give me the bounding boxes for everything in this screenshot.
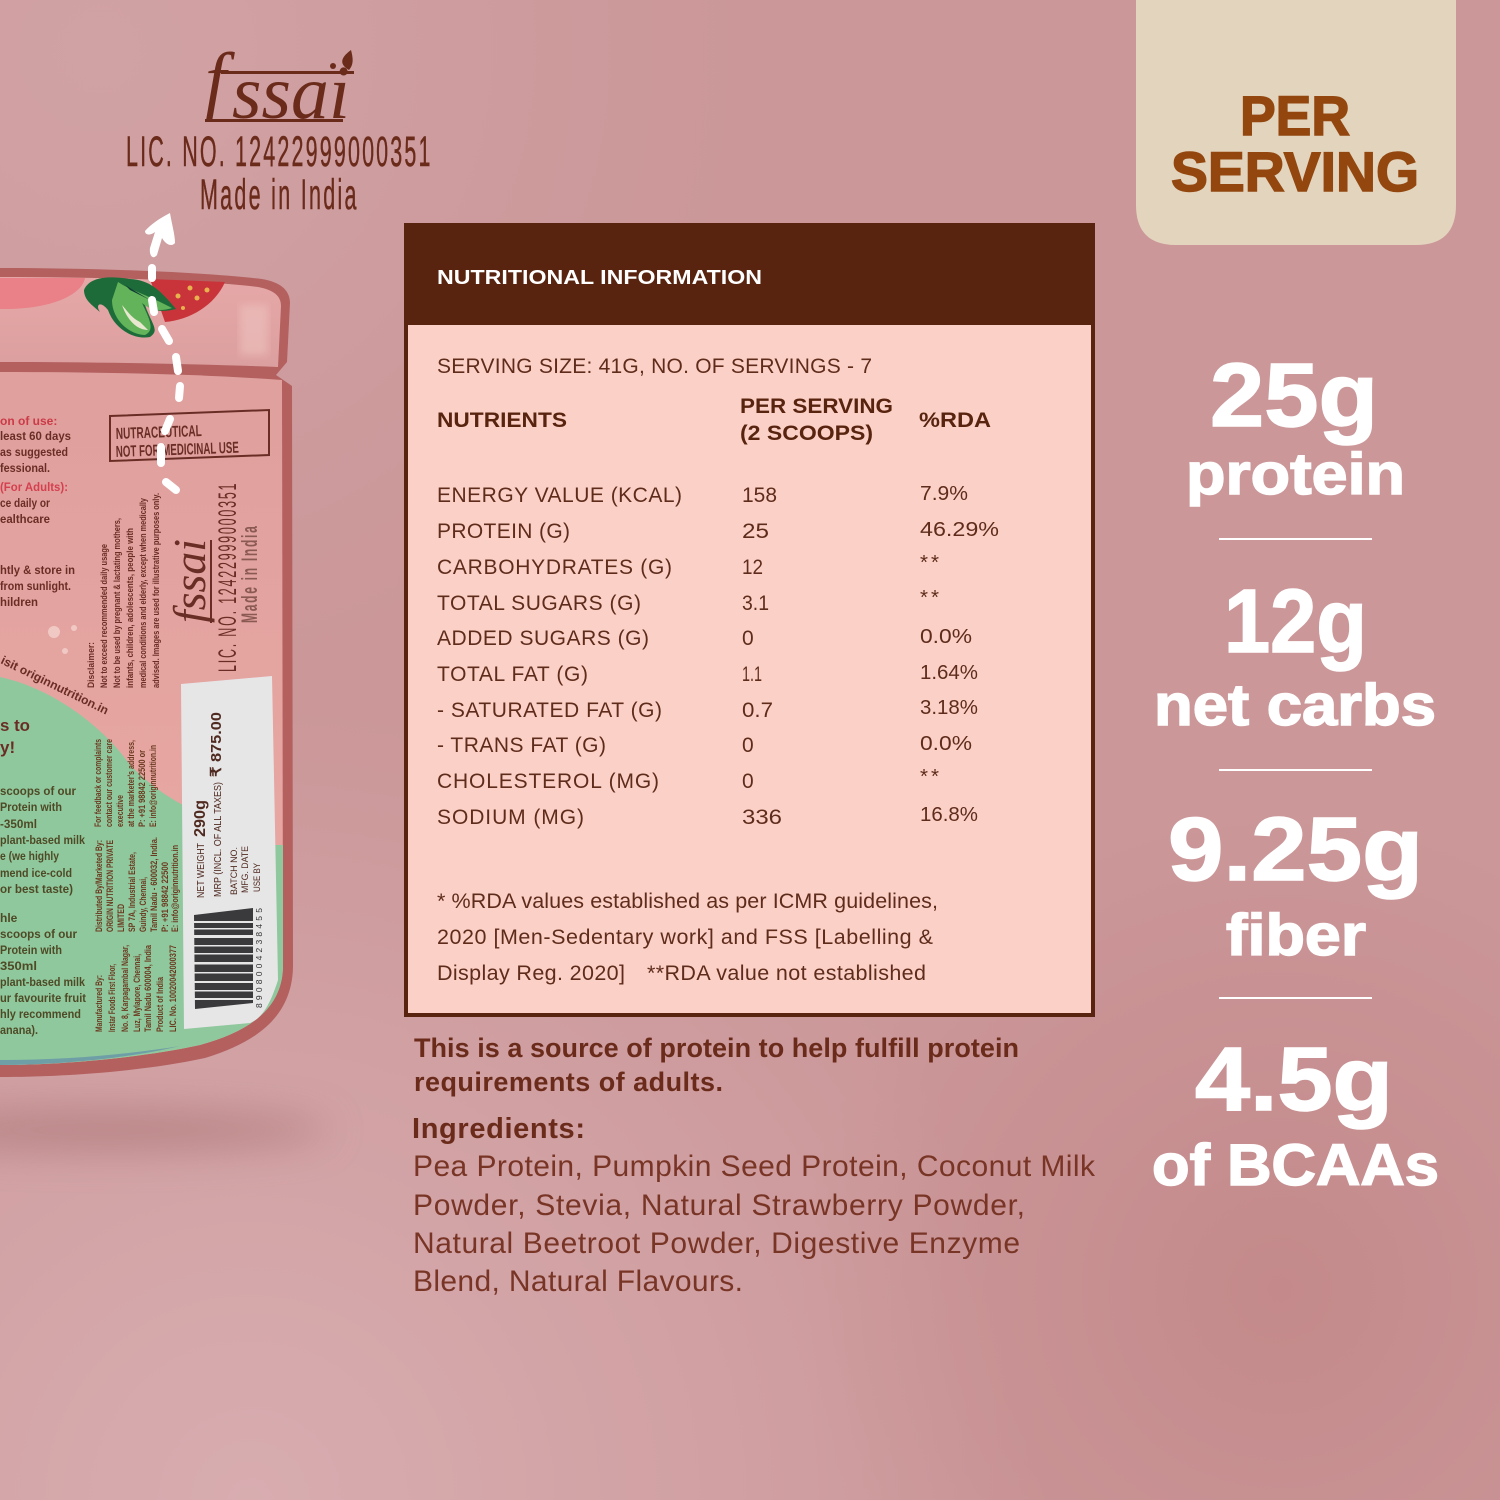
distributor text — [93, 739, 181, 1032]
ingredients: Blend, Natural Flavours. — [413, 1265, 743, 1298]
per serving values: 0 — [742, 627, 754, 650]
left column text: anana). — [0, 1023, 38, 1037]
serving size: SERVING SIZE: 41G, NO. OF SERVINGS - 7 — [437, 355, 872, 378]
jar fssai logo: Made in India — [237, 526, 262, 623]
stats column — [1152, 346, 1439, 1198]
left column text: y! — [0, 738, 15, 757]
column headers: (2 SCOOPS) — [740, 422, 873, 445]
white price label: USE BY — [252, 862, 263, 892]
fssai wordmark: f — [205, 38, 235, 122]
fssai wordmark — [205, 38, 354, 135]
distributor text: SP 7A, Industrial Estate, — [127, 852, 138, 932]
panel header — [404, 223, 1095, 325]
nutrient names: TOTAL FAT (G) — [437, 663, 588, 686]
nutrient names: - TRANS FAT (G) — [437, 734, 606, 757]
left column text: -350ml — [0, 817, 37, 831]
per serving values: 0 — [742, 734, 754, 757]
distributor text: Tamil Nadu 600004, India — [143, 944, 154, 1032]
distributor text: Guindy, Chennai, — [138, 877, 149, 932]
distributor text: Tamil Nadu - 600032, India. — [149, 837, 160, 932]
distributor text: No. 8, Karpagambal Nagar, — [120, 945, 131, 1032]
stat: net carbs — [1154, 572, 1436, 738]
barcode — [194, 908, 264, 1009]
per serving tag: SERVING — [1171, 140, 1419, 203]
rda values: 16.8% — [920, 803, 978, 826]
per serving values: 158 — [742, 484, 777, 507]
left column text: plant-based milk — [0, 975, 85, 989]
left column text: ur favourite fruit — [0, 991, 86, 1005]
left column text: fessional. — [0, 461, 50, 475]
stat: net carbs: 12g — [1224, 572, 1367, 672]
distributor text: E: info@originnutrition.in — [148, 745, 159, 827]
stat: protein: protein — [1186, 442, 1405, 507]
footnote: Display Reg. 2020] — [437, 961, 625, 985]
left column text: 350ml — [0, 959, 37, 973]
distributor text: P: +91 98842 22500 or — [137, 750, 148, 827]
rda values: 0.0% — [920, 625, 972, 648]
rda values: 46.29% — [920, 518, 999, 541]
footnote: 2020 [Men-Sedentary work] and FSS [Labelling & — [437, 925, 933, 949]
left column text: e (we highly — [0, 849, 59, 863]
rda values: ** — [920, 586, 939, 609]
jar lid — [0, 277, 281, 367]
ingredients: Powder, Stevia, Natural Strawberry Powder, — [413, 1189, 1025, 1222]
strawberry leaves — [84, 277, 176, 338]
stat: protein: 25g — [1210, 346, 1378, 446]
stat: BCAAs: of BCAAs — [1152, 1133, 1439, 1198]
nutrient names: PROTEIN (G) — [437, 520, 570, 543]
nutrient names: ENERGY VALUE (KCAL) — [437, 484, 682, 507]
left column text: least 60 days — [0, 429, 71, 443]
distributor text: Distributed By/Marketed By: — [94, 840, 105, 932]
protein claim: requirements of adults. — [414, 1067, 723, 1097]
left column text: (For Adults): — [0, 480, 68, 494]
stat: fiber: 9.25g — [1168, 800, 1423, 900]
per serving values: 25 — [742, 520, 769, 543]
jar body — [0, 372, 283, 1065]
per serving tag: PER — [1240, 84, 1350, 147]
fssai wordmark: ssai — [232, 51, 350, 135]
column headers — [437, 395, 991, 445]
left column text: hly recommend — [0, 1007, 81, 1021]
footnote: **RDA value not established — [647, 961, 926, 985]
distributor text: LIMITED — [116, 904, 127, 932]
per serving values — [742, 484, 782, 829]
nutrient names: - SATURATED FAT (G) — [437, 699, 662, 722]
per serving values: 3.1 — [742, 592, 769, 615]
left column text: scoops of our — [0, 927, 77, 941]
ingredients: Natural Beetroot Powder, Digestive Enzyme — [413, 1227, 1020, 1260]
footnote — [437, 889, 938, 985]
ingredients — [412, 1113, 1096, 1298]
left column text: htly & store in — [0, 563, 75, 577]
nutrient names: TOTAL SUGARS (G) — [437, 592, 641, 615]
left column text: mend ice-cold — [0, 866, 72, 880]
column headers: PER SERVING — [740, 395, 893, 418]
panel frame — [406, 225, 1093, 1015]
left column text: from sunlight. — [0, 579, 71, 593]
distributor text: Instar Foods First Floor, — [107, 964, 118, 1032]
per serving values: 12 — [742, 556, 763, 579]
arrow dashes — [152, 268, 180, 490]
jar outline — [0, 268, 293, 1077]
white price label: NET WEIGHT — [195, 843, 207, 898]
left column text: ealthcare — [0, 512, 50, 526]
disclaimer: Disclaimer: — [86, 642, 97, 688]
left column text: plant-based milk — [0, 833, 85, 847]
distributor text: ORIGIN NUTRITION PRIVATE — [105, 840, 116, 932]
per serving values: 0.7 — [742, 699, 773, 722]
disclaimer — [86, 493, 162, 688]
nutrition panel — [404, 223, 1095, 1015]
licence number: LIC. NO. 12422999000351 — [126, 128, 432, 176]
left column text: or best taste) — [0, 882, 73, 896]
nutrient names — [437, 484, 682, 829]
website: isit originnutrition.in — [0, 653, 111, 717]
jar shadow — [0, 1110, 330, 1150]
column headers: NUTRIENTS — [437, 409, 567, 432]
left column text: Protein with — [0, 943, 62, 957]
stat: protein — [1186, 346, 1405, 507]
nutraceutical box — [110, 410, 269, 461]
nutraceutical box: NUTRACEUTICAL — [116, 423, 202, 443]
made in india: Made in India — [200, 171, 358, 219]
per serving values: 1.1 — [742, 663, 762, 686]
green label area — [0, 677, 283, 1065]
blue edge — [0, 1046, 180, 1065]
per serving values: 336 — [742, 806, 782, 829]
rda values: ** — [920, 551, 939, 574]
nutrient names: SODIUM (MG) — [437, 806, 584, 829]
nutraceutical box: NOT FOR MEDICINAL USE — [116, 440, 239, 461]
rda values — [920, 482, 999, 826]
distributor text: E: info@originnutrition.in — [170, 845, 181, 932]
lid pink patch — [0, 278, 85, 309]
distributor text: P: +91 98842 22500 — [160, 862, 171, 932]
ingredients: Ingredients: — [412, 1113, 585, 1145]
product jar — [0, 268, 293, 1077]
jar fssai logo: LIC. NO. 12422999000351 — [214, 483, 242, 672]
stat: BCAAs: 4.5g — [1195, 1030, 1393, 1130]
stat: net carbs: net carbs — [1154, 673, 1436, 738]
rda values: 0.0% — [920, 732, 972, 755]
nutrient names: ADDED SUGARS (G) — [437, 627, 649, 650]
white price label: MFG. DATE — [240, 846, 251, 893]
disclaimer: medical conditions and elderly, except when medically — [138, 497, 149, 688]
protein claim: This is a source of protein to help fulfill protein — [414, 1033, 1019, 1063]
rda values: 1.64% — [920, 661, 978, 684]
left column text: hildren — [0, 595, 38, 609]
stat: fiber: fiber — [1226, 903, 1366, 968]
rda values: 3.18% — [920, 696, 978, 719]
distributor text: For feedback or complaints — [93, 739, 104, 827]
left column text: ce daily or — [0, 496, 50, 510]
white price label: BATCH NO. — [229, 847, 240, 895]
stat: fiber — [1168, 800, 1423, 968]
dashed arrow — [145, 213, 180, 490]
panel title: NUTRITIONAL INFORMATION — [437, 266, 762, 289]
white price label — [181, 676, 278, 1029]
per serving tag — [1136, 0, 1456, 245]
left column text: Protein with — [0, 800, 62, 814]
arrow head — [145, 213, 175, 257]
left column text: s to — [0, 716, 30, 735]
white price label: 290g — [192, 800, 209, 837]
nutrient names: CARBOHYDRATES (G) — [437, 556, 672, 579]
disclaimer: infants, children, adolescents, people with — [125, 528, 136, 688]
white price label: MRP (INCL. OF ALL TAXES) — [213, 782, 224, 897]
strawberry — [150, 279, 225, 322]
rda values: ** — [920, 765, 939, 788]
distributor text: Luz, Mylapore, Chennai, — [132, 954, 143, 1032]
nutrient names: CHOLESTEROL (MG) — [437, 770, 659, 793]
distributor text: Product of India — [155, 976, 166, 1032]
left column text: as suggested — [0, 445, 68, 459]
left column text: on of use: — [0, 414, 57, 428]
lid highlight — [240, 305, 268, 355]
left column text: hle — [0, 911, 18, 925]
jar fssai logo: fssai — [164, 539, 215, 623]
per serving values: 0 — [742, 770, 754, 793]
distributor text: Manufactured By: — [94, 975, 105, 1032]
footnote: * %RDA values established as per ICMR guidelines, — [437, 889, 938, 913]
distributor text: LIC. No. 10020042000377 — [168, 945, 179, 1032]
disclaimer: advised. Images are used for illustrative purposes only. — [151, 493, 162, 688]
column headers: %RDA — [919, 409, 991, 432]
protein claim — [414, 1033, 1019, 1097]
stat: BCAAs — [1152, 1030, 1439, 1198]
disclaimer: Not to exceed recommended daily usage — [99, 544, 110, 688]
distributor text: executive — [115, 795, 126, 827]
white price label: ₹ 875.00 — [208, 712, 225, 777]
fssai logo block — [126, 38, 432, 219]
distributor text: at the marketer's address, — [126, 740, 137, 827]
jar fssai logo — [164, 483, 262, 672]
distributor text: contact our customer care — [104, 739, 115, 827]
rda values: 7.9% — [920, 482, 968, 505]
ingredients: Pea Protein, Pumpkin Seed Protein, Coconut Milk — [413, 1150, 1096, 1183]
disclaimer: Not to be used by pregnant & lactating mothers, — [112, 518, 123, 688]
splash dots — [48, 625, 77, 654]
left column text — [0, 414, 86, 1037]
left column text: scoops of our — [0, 784, 76, 798]
barcode: 8908004238455 — [254, 908, 264, 1008]
